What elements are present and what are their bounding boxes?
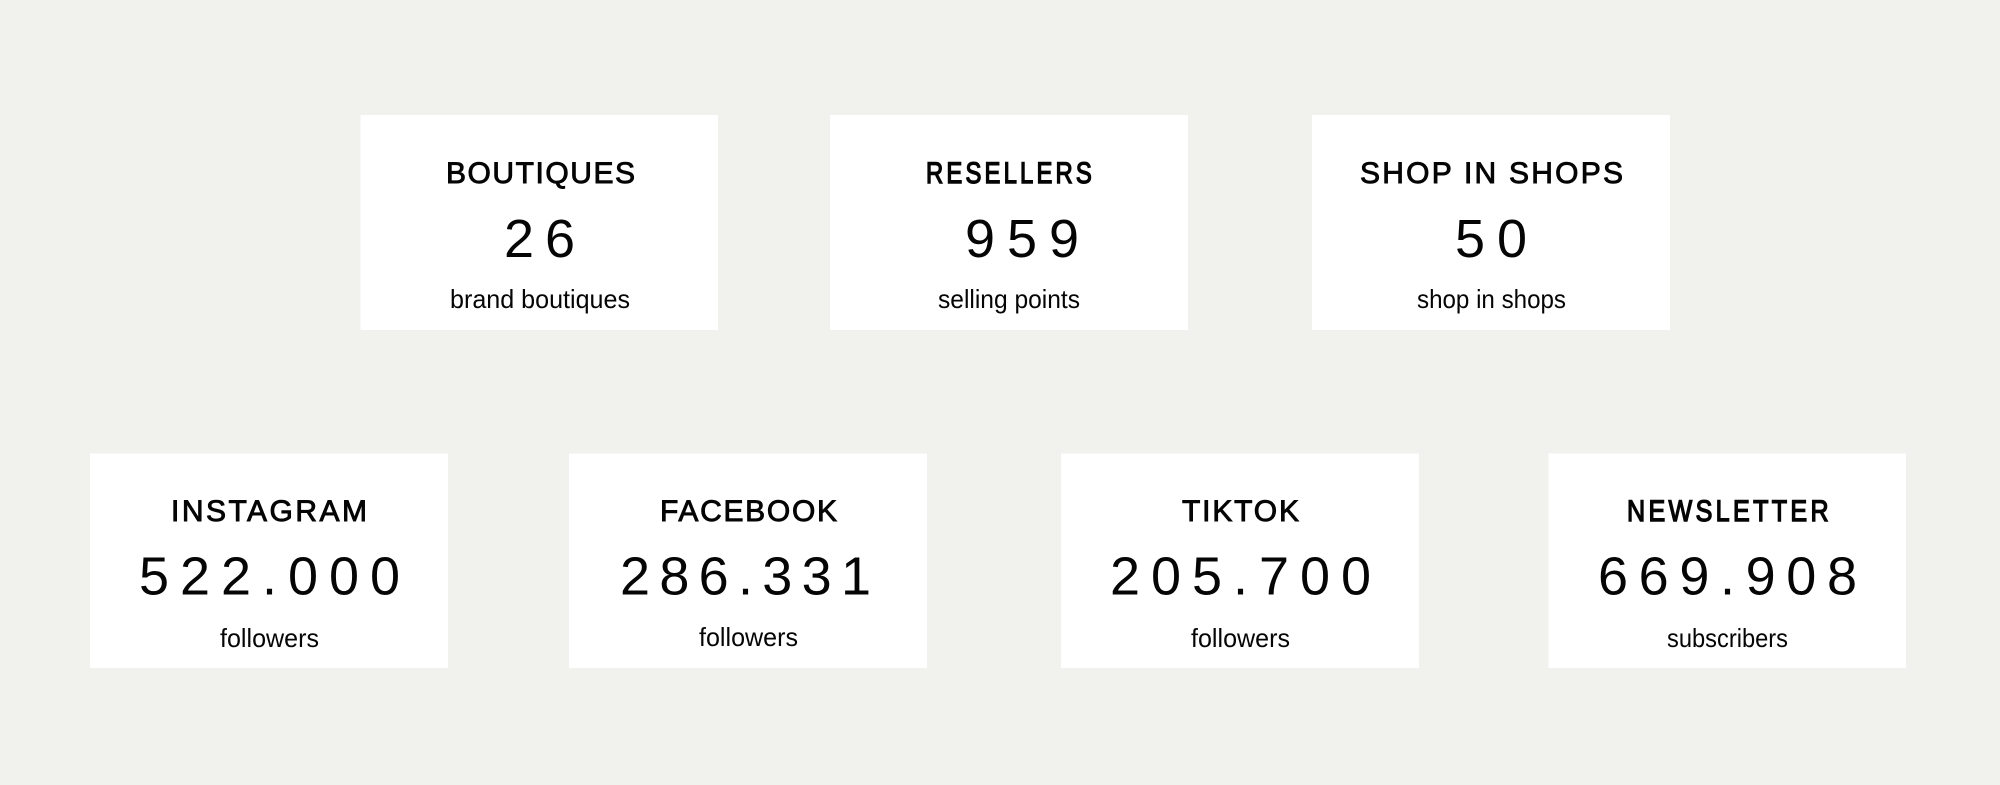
number: 50: 50 bbox=[1455, 209, 1527, 269]
number: 205.700: 205.700 bbox=[1110, 546, 1371, 606]
number: 286.331: 286.331 bbox=[620, 546, 871, 606]
number: 26: 26 bbox=[504, 209, 575, 269]
label: selling points: selling points bbox=[938, 284, 1080, 314]
heading: resellers: RESELLERS bbox=[926, 157, 1095, 190]
label: brand boutiques: brand boutiques bbox=[450, 284, 630, 314]
heading: boutiques: BOUTIQUES bbox=[446, 157, 635, 190]
heading: shop in shops: SHOP IN SHOPS bbox=[1360, 157, 1623, 190]
card: boutiques bbox=[360, 115, 718, 330]
label: followers: followers bbox=[1191, 623, 1290, 653]
card: newsletter bbox=[1548, 454, 1906, 668]
number: 522.000: 522.000 bbox=[139, 546, 400, 606]
card: resellers bbox=[830, 115, 1188, 330]
label: subscribers: subscribers bbox=[1667, 623, 1788, 653]
label: followers: followers bbox=[220, 623, 319, 653]
card: facebook bbox=[569, 454, 927, 668]
heading: newsletter: NEWSLETTER bbox=[1627, 495, 1832, 528]
label: shop in shops: shop in shops bbox=[1417, 284, 1566, 314]
card: tiktok bbox=[1061, 454, 1419, 668]
heading: instagram: INSTAGRAM bbox=[171, 495, 367, 528]
label: followers: followers bbox=[699, 622, 798, 652]
heading: tiktok: TIKTOK bbox=[1182, 495, 1299, 528]
number: 959: 959 bbox=[965, 209, 1079, 269]
number: 669.908: 669.908 bbox=[1598, 546, 1857, 606]
heading: facebook: FACEBOOK bbox=[660, 495, 837, 528]
card: instagram bbox=[90, 454, 448, 668]
card: shop in shops bbox=[1312, 115, 1670, 330]
